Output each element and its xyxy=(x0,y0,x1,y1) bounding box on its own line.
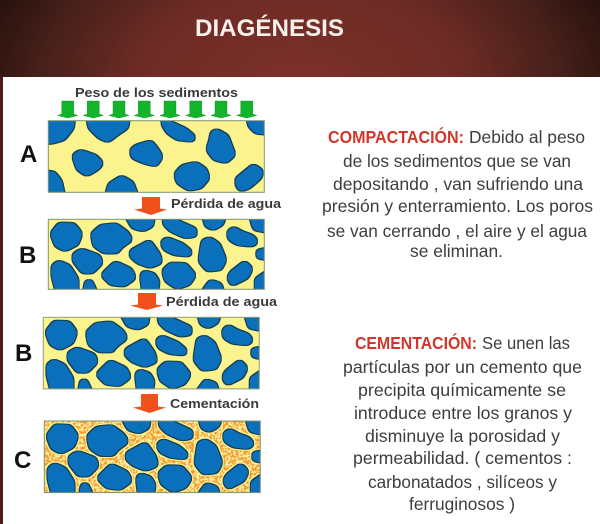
orange arrow 2 xyxy=(130,293,163,310)
orange arrow 1 xyxy=(134,197,167,215)
left edge strip xyxy=(0,77,3,524)
letter C: C xyxy=(14,447,31,474)
label: peso de los sedimentos: Peso de los sedimentos xyxy=(75,85,238,100)
text block: cementacion: partículas por un cemento que xyxy=(343,357,582,377)
text block: cementacion: introduce entre los granos y xyxy=(354,403,572,423)
text block: cementacion: permeabilidad. ( cementos : xyxy=(353,448,572,468)
text block: compactacion: COMPACTACIÓN: xyxy=(328,126,464,147)
text block: cementacion: disminuye la porosidad y xyxy=(365,426,560,446)
panel A: loose sediment xyxy=(48,120,265,193)
panel B: compacted sediment xyxy=(48,218,265,290)
header banner xyxy=(0,0,600,77)
text block: compactacion: presión y enterramiento. Los poros xyxy=(322,196,593,216)
text block: compactacion xyxy=(322,126,593,261)
label: perdida de agua 1: Pérdida de agua xyxy=(171,196,282,211)
text block: compactacion: depositando , van sufriendo una xyxy=(333,174,583,194)
text block: compactacion: se eliminan. xyxy=(410,241,503,261)
letter A: A xyxy=(20,141,37,168)
text block: cementacion: Se unen las xyxy=(482,333,570,353)
orange arrow 3 xyxy=(133,394,166,413)
text block: cementacion: precipita químicamente se xyxy=(358,380,566,400)
text block: cementacion xyxy=(343,332,582,514)
green pressure arrows xyxy=(58,101,257,118)
text block: cementacion: carbonatados , silíceos y xyxy=(368,472,557,492)
letter B second: B xyxy=(15,340,32,367)
text block: cementacion: ferruginosos ) xyxy=(409,494,515,514)
text block: compactacion: Debido al peso xyxy=(469,127,585,147)
letter B first: B xyxy=(19,242,36,269)
panel B second: compacted sediment xyxy=(42,316,260,390)
panel C: cemented sediment xyxy=(44,420,261,494)
text block: compactacion: de los sedimentos que se van xyxy=(343,151,571,171)
label: cementacion: Cementación xyxy=(170,396,259,411)
text block: compactacion: se van cerrando , el aire y el agua xyxy=(327,221,587,241)
text block: cementacion: CEMENTACIÓN: xyxy=(355,332,477,353)
title: DIAGÉNESIS xyxy=(195,14,344,42)
label: perdida de agua 2: Pérdida de agua xyxy=(166,294,278,309)
